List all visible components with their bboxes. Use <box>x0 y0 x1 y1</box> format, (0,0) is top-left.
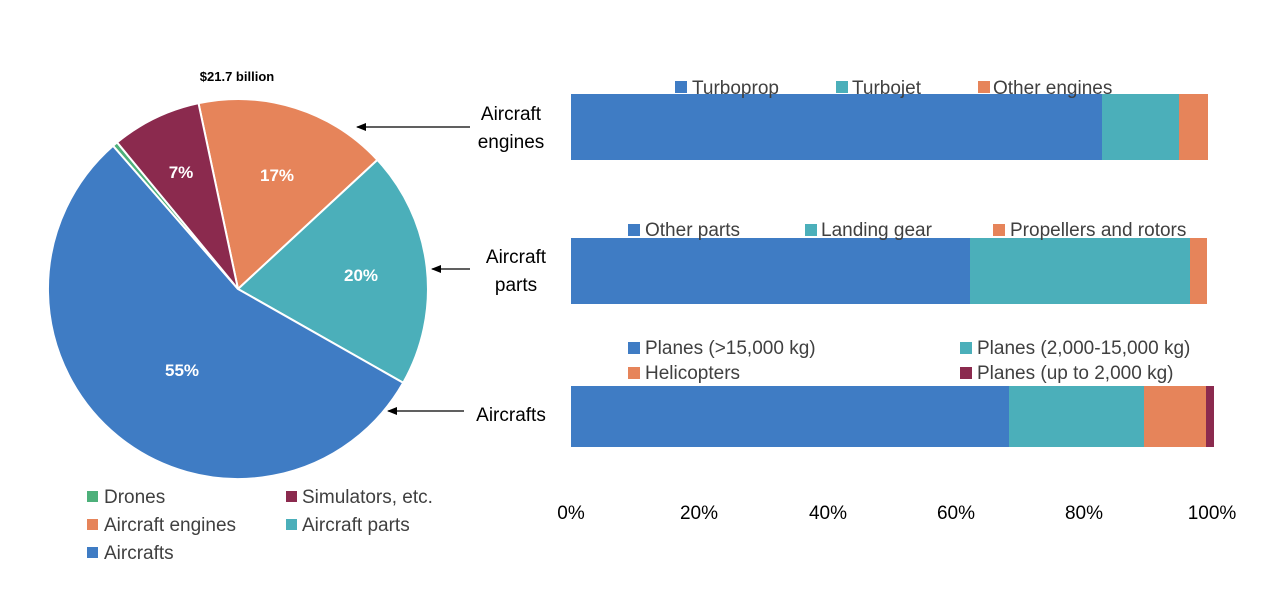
pie total label: $21.7 billion <box>200 69 274 84</box>
aircrafts legend: Planes (>15,000 kg) <box>645 338 816 359</box>
x axis labels: 80% <box>1065 503 1103 524</box>
category labels: engines <box>478 132 544 153</box>
aircrafts legend: Helicopters <box>645 363 740 384</box>
pie percent labels <box>165 163 378 380</box>
aircrafts legend: Planes (up to 2,000 kg) <box>977 363 1173 384</box>
pie legend <box>87 487 433 564</box>
category labels: Aircraft <box>481 104 542 125</box>
x axis labels: 20% <box>680 503 718 524</box>
x axis labels: 0% <box>557 503 585 524</box>
engines bar <box>571 94 1102 160</box>
pie chart <box>48 99 428 479</box>
category labels: Aircraft <box>486 247 547 268</box>
engines legend: Turbojet <box>852 78 922 99</box>
pie percent labels: 17% <box>260 166 294 185</box>
pie percent labels: 7% <box>169 163 193 182</box>
engines legend: Turboprop <box>692 78 779 99</box>
parts legend <box>628 220 1186 241</box>
arrows <box>357 127 470 411</box>
pie legend: Aircraft parts <box>302 515 410 536</box>
pie legend: Aircrafts <box>104 543 174 564</box>
category labels <box>476 104 547 426</box>
category labels: Aircrafts <box>476 405 546 426</box>
parts legend: Propellers and rotors <box>1010 220 1186 241</box>
parts legend: Landing gear <box>821 220 933 241</box>
x axis labels: 60% <box>937 503 975 524</box>
x axis labels <box>557 503 1236 524</box>
category labels: parts <box>495 275 537 296</box>
pie percent labels: 55% <box>165 361 199 380</box>
aircrafts legend <box>628 338 1190 384</box>
pie percent labels: 20% <box>344 266 378 285</box>
pie legend: Simulators, etc. <box>302 487 433 508</box>
engines legend: Other engines <box>993 78 1112 99</box>
engines legend <box>675 78 1112 99</box>
parts bar <box>571 238 970 304</box>
x axis labels: 100% <box>1188 503 1236 524</box>
pie legend: Aircraft engines <box>104 515 236 536</box>
aircrafts bar <box>571 386 1009 447</box>
pie legend: Drones <box>104 487 165 508</box>
parts legend: Other parts <box>645 220 740 241</box>
x axis labels: 40% <box>809 503 847 524</box>
aircrafts legend: Planes (2,000-15,000 kg) <box>977 338 1190 359</box>
